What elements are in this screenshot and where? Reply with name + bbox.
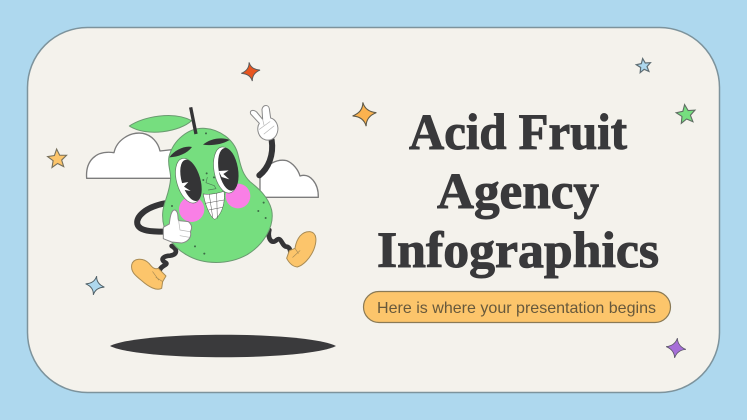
hand: thumbs up bbox=[163, 210, 192, 243]
title line 3: Infographics bbox=[377, 223, 659, 279]
star: orange bbox=[351, 101, 378, 128]
cheek: right bbox=[226, 184, 250, 208]
hand: peace sign bbox=[250, 105, 278, 140]
left leg bbox=[159, 246, 176, 272]
star: blue top bbox=[636, 58, 652, 73]
left arm bbox=[137, 203, 165, 232]
ground shadow bbox=[110, 335, 336, 357]
star: blue bottom bbox=[84, 274, 106, 297]
freckles bbox=[171, 132, 267, 255]
eye: right bbox=[210, 145, 242, 195]
star: green bbox=[675, 103, 697, 124]
title line 1: Acid Fruit bbox=[409, 105, 627, 161]
subtitle pill bbox=[364, 292, 670, 322]
eyebrow: left bbox=[169, 147, 192, 157]
right leg bbox=[269, 230, 291, 253]
title line 2: Agency bbox=[437, 164, 599, 220]
nose bbox=[206, 177, 216, 190]
shoe: left bbox=[132, 259, 166, 289]
star: red-orange bbox=[240, 61, 262, 83]
title bbox=[377, 105, 659, 279]
eye: left bbox=[171, 155, 206, 206]
teeth bbox=[203, 191, 224, 219]
eyebrow: right bbox=[203, 138, 230, 145]
star: purple bbox=[665, 337, 687, 359]
right arm bbox=[259, 140, 272, 175]
subtitle text: Here is where your presentation begins bbox=[377, 300, 656, 317]
cloud: left bbox=[87, 133, 175, 178]
leaf bbox=[129, 115, 192, 132]
stem bbox=[191, 107, 196, 134]
shoe: right bbox=[287, 232, 316, 267]
pear body bbox=[163, 128, 272, 262]
cloud: right bbox=[260, 160, 318, 197]
illustration: pear mascot bbox=[87, 105, 318, 289]
star: yellow bbox=[47, 148, 67, 168]
cheek: left bbox=[179, 197, 204, 222]
